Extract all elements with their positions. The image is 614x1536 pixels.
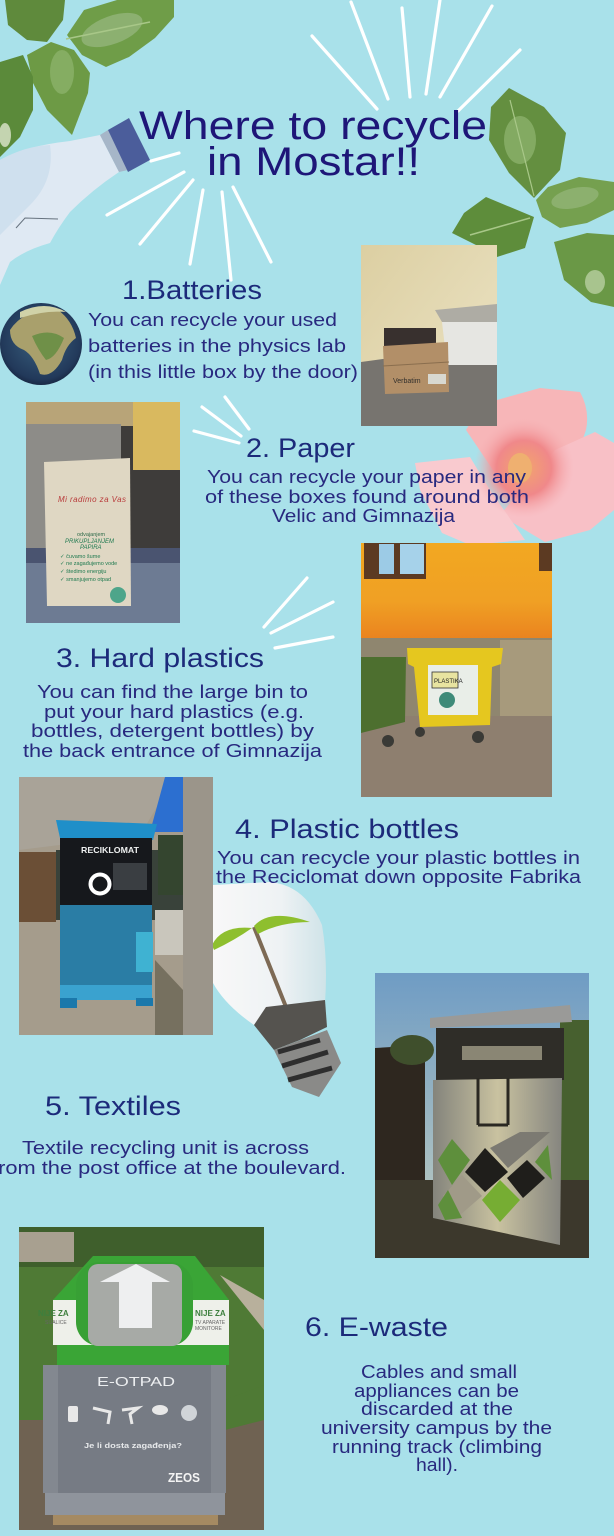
title: in Mostar!! — [207, 140, 420, 184]
photo: paper box: ✓ čuvamo šume — [60, 554, 100, 560]
panel: plastic bottles — [19, 777, 582, 1035]
text: plastic bottles description: You can recycle your plastic bottles in — [217, 847, 580, 868]
text: paper description — [205, 466, 529, 526]
text: e-waste description: Cables and small — [361, 1361, 517, 1382]
heading: plastic bottles: 4. Plastic bottles — [235, 814, 459, 844]
heading: batteries: 1.Batteries — [122, 275, 262, 305]
photo: paper box: ✓ štedimo energiju — [60, 569, 106, 575]
photo: paper box: Mi radimo za Vas — [58, 495, 126, 504]
icon: plastic bottle — [0, 118, 150, 285]
text: batteries description: You can recycle your used — [88, 309, 337, 330]
photo: textile recycling unit — [375, 973, 589, 1258]
text: hard plastics description: bottles, detergent bottles) by — [31, 720, 315, 741]
photo: battery box — [361, 245, 497, 426]
photo: paper box: ✓ ne zagađujemo vode — [60, 561, 117, 567]
text: hard plastics description: You can find the large bin to — [37, 681, 308, 702]
panel: e-waste — [19, 1227, 552, 1530]
icon: pink flower — [415, 388, 614, 545]
panel: textiles — [0, 973, 589, 1258]
heading: e-waste: 6. E-waste — [305, 1312, 448, 1342]
text: textiles description — [0, 1137, 346, 1178]
text: e-waste description: hall). — [416, 1454, 458, 1475]
photo: paper box: PRIKUPLJANJEM — [65, 539, 114, 545]
text: batteries description: (in this little box by the door) — [88, 361, 358, 382]
text: e-waste description: appliances can be — [354, 1380, 519, 1401]
photo: paper box: odvajanjem — [77, 532, 106, 538]
heading: paper: 2. Paper — [246, 433, 355, 463]
text: paper description: You can recycle your paper in any — [207, 466, 527, 487]
heading: hard plastics: 3. Hard plastics — [56, 643, 264, 673]
text: batteries description: batteries in the physics lab — [88, 335, 346, 356]
leaves: top left — [0, 0, 174, 157]
photo: battery box: Verbatim — [393, 378, 421, 385]
photo: Reciklomat machine — [19, 777, 213, 1035]
photo: e-waste bin: NIJE ZA — [38, 1309, 69, 1318]
icon: earth globe — [0, 303, 82, 385]
leaves: top right — [452, 88, 614, 307]
photo: paper box — [26, 402, 180, 623]
photo: yellow plastics bin: PLASTIKA — [434, 679, 463, 685]
text: hard plastics description: put your hard plastics (e.g. — [44, 701, 304, 722]
photo: Reciklomat machine: RECIKLOMAT — [81, 845, 140, 855]
text: textiles description: from the post office at the boulevard. — [0, 1157, 346, 1178]
rays: top right burst — [312, 0, 520, 111]
text: e-waste description: running track (climbing — [332, 1436, 542, 1457]
photo: e-waste bin: E-OTPAD — [97, 1374, 175, 1389]
rays: paper accent — [194, 397, 249, 443]
rays: lower left burst — [107, 153, 271, 280]
photo: e-waste bin — [19, 1227, 264, 1530]
photo: e-waste bin: ZEOS — [168, 1470, 200, 1485]
photo: e-waste bin: MONITORE — [195, 1326, 223, 1332]
text: hard plastics description: the back entrance of Gimnazija — [23, 740, 323, 761]
photo: e-waste bin: SIJALICE — [45, 1320, 67, 1326]
text: paper description: of these boxes found around both — [205, 486, 529, 507]
icon: light bulb with sprout — [212, 882, 341, 1097]
text: plastic bottles description: the Reciclomat down opposite Fabrika — [216, 866, 582, 887]
rays: hard plastics accent — [264, 578, 333, 648]
title — [139, 104, 487, 184]
panel: batteries — [88, 245, 497, 426]
text: e-waste description — [321, 1361, 552, 1475]
text: e-waste description: discarded at the — [361, 1398, 513, 1419]
text: paper description: Velic and Gimnazija — [272, 505, 456, 526]
photo: yellow plastics bin — [361, 543, 552, 797]
panel: paper — [26, 402, 529, 623]
photo: paper box: PAPIRA — [80, 545, 102, 551]
photo: paper box: ✓ smanjujemo otpad — [60, 577, 111, 583]
title: Where to recycle — [139, 104, 487, 148]
photo: e-waste bin: Je li dosta zagađenja? — [84, 1443, 182, 1450]
text: hard plastics description — [23, 681, 323, 761]
panel: hard plastics — [23, 543, 552, 797]
photo: e-waste bin: NIJE ZA — [195, 1309, 226, 1318]
text: batteries description — [88, 309, 358, 382]
photo: e-waste bin: TV APARATE — [195, 1320, 226, 1326]
text: e-waste description: university campus by the — [321, 1417, 552, 1438]
heading: textiles: 5. Textiles — [45, 1091, 181, 1121]
text: textiles description: Textile recycling unit is across — [22, 1137, 309, 1158]
text: plastic bottles description — [216, 847, 582, 887]
